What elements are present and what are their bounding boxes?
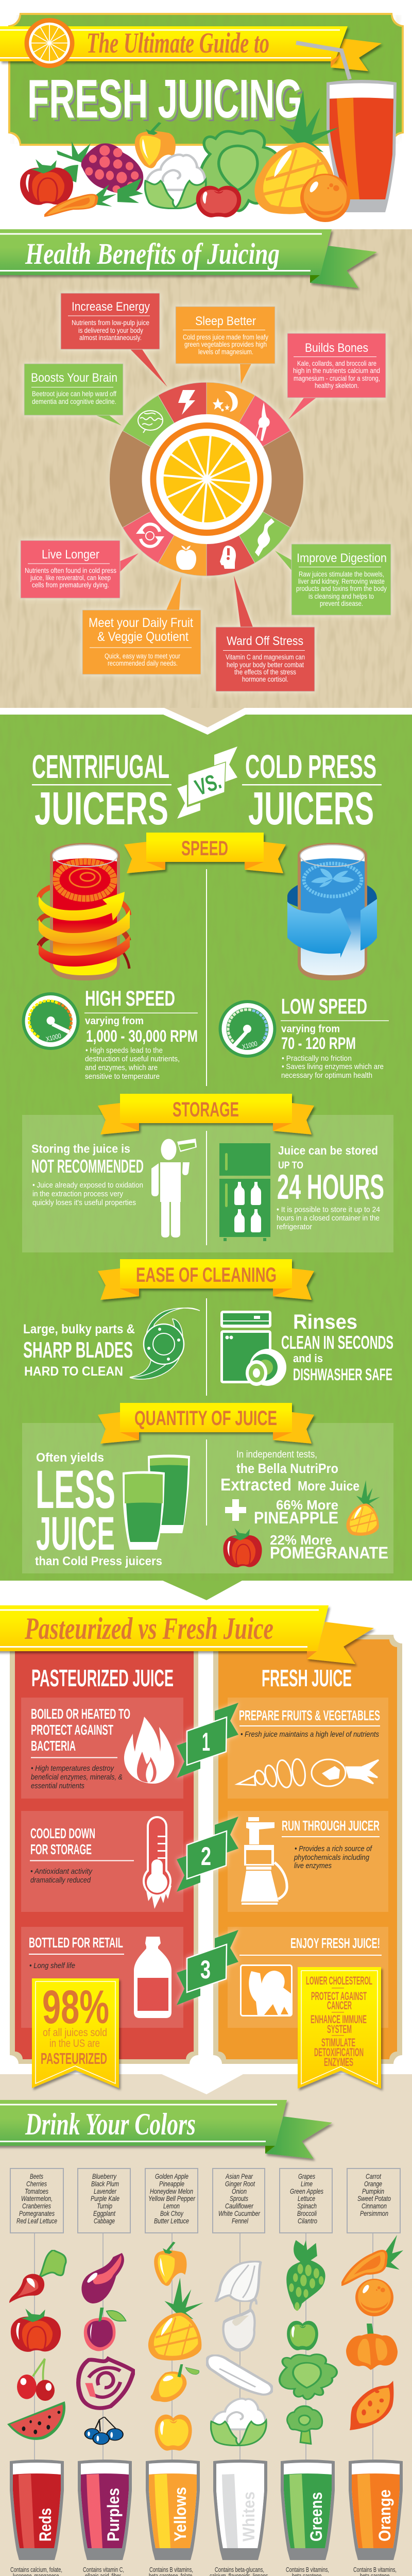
text block: low speed: 70 - 120 RPM (281, 1034, 356, 1053)
icon: moon and stars (213, 391, 238, 412)
text block: boiled or heated: • High temperatures destroy (31, 1764, 114, 1773)
list: whites: Asian Pear (225, 2172, 253, 2180)
heading ribbon: pasteurized vs fresh juice (0, 1605, 374, 1664)
glass: purples (78, 2460, 132, 2560)
tan section background (0, 229, 412, 708)
panel: title label (8, 13, 404, 146)
text block: storing not recommended: quickly loses it's useful properties (32, 1198, 136, 1207)
list: purples (78, 2168, 130, 2233)
icon: low speed gauge: X1000 (242, 1040, 258, 1050)
panel: pasteurized juice: PASTEURIZED JUICE (31, 1665, 174, 1691)
text block: bella nutripro results: POMEGRANATE (270, 1544, 388, 1562)
list: yellows: Yellow Bell Pepper (148, 2194, 196, 2202)
callout: ward off stress: the effects of the stress (234, 668, 296, 676)
banner: fresh juice benefits: ENZYMES (324, 2056, 353, 2069)
icon: two juice glasses (123, 1455, 190, 1550)
list: whites: White Cucumber (218, 2209, 261, 2217)
panel: quantity (22, 1423, 393, 1573)
glass: yellows: Yellows (171, 2487, 190, 2541)
callout: ward off stress: help your body better combat (227, 661, 304, 669)
text block: high speed (84, 986, 198, 1081)
text block: reds nutrients (8, 2566, 66, 2576)
banner: storage (98, 1094, 314, 1134)
banner: ease of cleaning (98, 1259, 314, 1300)
callout: live longer: cells from prematurely dying. (32, 581, 109, 589)
icon: white produce column (207, 2261, 272, 2446)
text block: greens nutrients (286, 2566, 329, 2576)
heading: centrifugal juicers: CENTRIFUGAL (32, 748, 169, 785)
callout: live longer: Nutrients often found in cold press (25, 567, 116, 574)
text block: storing not recommended (31, 1142, 144, 1207)
heading: the ultimate guide to: The Ultimate Guide to (87, 27, 269, 59)
text block: storing not recommended: • Juice already exposed to oxidation (32, 1181, 143, 1190)
callout: increase energy: Increase Energy (72, 300, 150, 314)
list: purples: Blueberry (92, 2172, 117, 2180)
list: purples: Black Plum (91, 2179, 119, 2188)
text block: high speed: sensitive to temperature (85, 1072, 160, 1081)
segment: fruit and veg (158, 479, 207, 576)
callout: daily fruit and veggie quotient: Meet your Daily Fruit (89, 616, 193, 630)
callout: builds bones: healthy skeleton. (315, 382, 359, 389)
panel: pasteurized juice (10, 1635, 198, 2064)
segment: energy (158, 382, 207, 479)
callout: improve digestion: prevent disease. (320, 600, 363, 607)
banner: ease of cleaning: EASE OF CLEANING (136, 1264, 277, 1286)
icon: high speed gauge (22, 992, 79, 1050)
text block: run through juicer: live enzymes (294, 1861, 332, 1870)
banner: 98 percent pasteurized (32, 1978, 119, 2088)
text block: oranges nutrients (353, 2566, 397, 2576)
text block: prepare fruits (239, 1707, 380, 1739)
glass: orange: Orange (375, 2489, 394, 2541)
text block: high speed: destruction of useful nutrients, (85, 1055, 180, 1063)
icon: orange produce column (341, 2235, 403, 2430)
icon: stressed head (220, 546, 236, 569)
text block: low speed: • Practically no friction (282, 1054, 352, 1063)
icon: yellow produce column (148, 2242, 203, 2451)
text block: stored up to 24 hours: hours in a closed container in the (277, 1214, 380, 1223)
list: whites (213, 2168, 265, 2233)
glass: greens (281, 2460, 335, 2560)
glass: yellows (146, 2460, 200, 2560)
callout: sleep better: Cold press juice made from leafy (183, 333, 268, 341)
text block: run through juicer: phytochemicals including (294, 1853, 370, 1862)
text block: rinses clean (281, 1311, 393, 1384)
callout: improve digestion: products and toxins from the body (296, 585, 387, 592)
text block: bottled for retail: BOTTLED FOR RETAIL (29, 1935, 123, 1951)
callout: sleep better: Sleep Better (195, 314, 256, 328)
callout: sleep better: levels of magnesium. (198, 348, 253, 355)
list: reds: Cherries (26, 2179, 47, 2188)
list: purples: Cabbage (94, 2216, 115, 2225)
icon: refrigerator with bottles (219, 1143, 270, 1241)
callout: builds bones: magnesium - crucial for a strong, (294, 375, 380, 382)
banner: quantity of juice (98, 1403, 314, 1444)
icon: retail bottle (134, 1937, 171, 2018)
banner: 98 percent pasteurized: of all juices sold (43, 2027, 107, 2039)
list: greens: Broccoli (297, 2209, 317, 2217)
text block: boiled or heated: PROTECT AGAINST (31, 1722, 113, 1738)
heading ribbon: drink your colors: Drink Your Colors (25, 2107, 196, 2141)
icon: apple (176, 546, 196, 570)
green section background (0, 715, 412, 1581)
list: greens: Spinach (297, 2202, 317, 2210)
callout: ward off stress (216, 575, 315, 691)
icon: digestive tract (255, 518, 274, 556)
glass: reds (10, 2460, 64, 2560)
segment: stress (207, 479, 255, 576)
text block: bella nutripro results: the Bella NutriPro (236, 1461, 338, 1476)
text block: bottled for retail: • Long shelf life (29, 1961, 75, 1970)
vs ribbon (177, 747, 237, 819)
text block: sharp blades: SHARP BLADES (23, 1337, 133, 1363)
banner: 98 percent pasteurized: 98% (42, 1981, 109, 2033)
list: yellows: Lemon (163, 2202, 180, 2210)
icon: number 1 ribbon: 1 (202, 1727, 210, 1756)
banner: fresh juice benefits (298, 1967, 381, 2089)
heading: cold press juicers (242, 748, 382, 835)
text block: low speed: • Saves living enzymes which are (282, 1062, 384, 1071)
heading: centrifugal juicers (32, 748, 171, 835)
heading: centrifugal juicers: JUICERS (35, 783, 168, 835)
drink your colors background (0, 2074, 412, 2576)
list: yellows: Honeydew Melon (150, 2187, 193, 2195)
text block: bella nutripro results: 66% More (276, 1497, 338, 1513)
text block: run through juicer (282, 1818, 380, 1870)
text block: low speed: necessary for optimum health (281, 1071, 372, 1080)
icon: number 3 ribbon (177, 1930, 238, 2005)
icon: juicer machine (241, 1817, 287, 1905)
banner: quantity of juice: QUANTITY OF JUICE (134, 1407, 277, 1430)
text block: purples nutrients (83, 2566, 124, 2576)
callout: increase energy (61, 293, 167, 387)
list: oranges: Cinnamon (362, 2202, 387, 2210)
icon: juicer blade (130, 1308, 200, 1379)
callout: sleep better (176, 307, 275, 384)
heading ribbon: drink your colors (0, 2100, 332, 2159)
text block: high speed: varying from (85, 1015, 144, 1027)
list: reds: Pomegranates (19, 2209, 55, 2217)
icon: sliced carrot (237, 1758, 379, 1789)
list: oranges: Persimmon (360, 2209, 388, 2217)
text block: boiled or heated: BOILED OR HEATED TO (31, 1706, 130, 1722)
icon: pineapple (347, 1480, 380, 1536)
text block: rinses clean: and is (293, 1352, 323, 1365)
callout: live longer: juice, like resveratrol, can keep (30, 574, 111, 582)
list: reds: Red Leaf Lettuce (16, 2216, 57, 2225)
icon: pomegranate (223, 1528, 262, 1567)
callout: improve digestion: Improve Digestion (297, 551, 387, 565)
icon: large orange slice (142, 414, 272, 544)
list: reds: Beets (30, 2172, 43, 2180)
segment: longevity (123, 479, 207, 563)
icon: produce pile (20, 90, 350, 222)
list: yellows: Butter Lettuce (154, 2216, 189, 2225)
glass: reds: Reds (36, 2508, 55, 2541)
banner: speed (124, 833, 286, 873)
icon: number 2 ribbon: 2 (201, 1842, 211, 1871)
text block: stored up to 24 hours (277, 1144, 384, 1231)
icon: bone (256, 402, 270, 441)
banner: fresh juice benefits: CANCER (327, 1999, 352, 2012)
text block: whites nutrients (208, 2566, 271, 2576)
text block: boiled or heated: BACTERIA (31, 1738, 76, 1754)
callout: ward off stress: Ward Off Stress (227, 634, 303, 648)
glass: whites (213, 2460, 267, 2560)
icon: low speed gauge (218, 1000, 276, 1058)
banner: speed: SPEED (181, 837, 228, 860)
icon: orange slice (25, 18, 74, 68)
icon: low speed cold press cylinder (287, 843, 377, 980)
list: whites: Fennel (232, 2216, 249, 2225)
callout: builds bones (287, 333, 386, 419)
icon: cycle arrows (136, 524, 164, 547)
list: reds (10, 2168, 63, 2233)
text block: low speed: LOW SPEED (281, 994, 367, 1018)
text block: storing not recommended: NOT RECOMMENDED (31, 1156, 144, 1177)
banner: fresh juice benefits: STIMULATE (321, 2036, 355, 2049)
text block: greens nutrients: Contains B vitamins, (286, 2566, 329, 2573)
icon: plus sign (225, 1499, 246, 1521)
list: purples: Eggplant (93, 2209, 116, 2217)
segment: bones (207, 395, 290, 479)
list: reds: Tomatoes (25, 2187, 48, 2195)
text block: sharp blades: Large, bulky parts & (23, 1322, 135, 1336)
segment: digestion (207, 479, 290, 563)
icon: healthy person flexing (241, 1965, 291, 2015)
text block: bella nutripro results: In independent tests, (236, 1449, 317, 1460)
list: whites: Onion (232, 2187, 247, 2195)
icon: lightning bolt (178, 390, 195, 415)
callout: ward off stress: hormone cortisol. (242, 675, 288, 683)
callout: builds bones: Builds Bones (305, 341, 368, 355)
glass: greens: Greens (307, 2492, 325, 2541)
heading ribbon: health benefits of juicing: Health Benefits of Juicing (25, 237, 280, 270)
text block: cooled down: COOLED DOWN (30, 1825, 95, 1841)
callout: boosts your brain: Beetroot juice can help ward off (32, 390, 116, 398)
text block: cooled down: dramatically reduced (30, 1876, 91, 1885)
callout: improve digestion: Raw juices stimulate the bowels, (299, 570, 384, 578)
callout: live longer: Live Longer (42, 548, 99, 562)
callout: ward off stress: Vitamin C and magnesium can (226, 653, 305, 661)
title ribbon (0, 26, 382, 71)
icon: green produce column (280, 2240, 337, 2444)
callout: builds bones: high in the nutrients calcium and (293, 367, 380, 375)
text block: less juice: than Cold Press juicers (35, 1554, 162, 1568)
callout: increase energy: is delivered to your body (78, 327, 143, 334)
list: whites: Ginger Root (225, 2179, 255, 2188)
text block: purples nutrients: Contains vitamin C, (83, 2566, 124, 2573)
section divider chevron (0, 708, 412, 735)
text block: boiled or heated: beneficial enzymes, minerals, & (31, 1773, 123, 1782)
list: greens: Green Apples (290, 2187, 323, 2195)
text block: stored up to 24 hours: Juice can be stored (278, 1144, 378, 1157)
callout: improve digestion: liver and kidney. Removing waste (298, 578, 385, 585)
icon: flame (124, 1717, 174, 1784)
list: oranges: Pumpkin (362, 2187, 384, 2195)
icon: person drinking juice (151, 1139, 197, 1238)
list: oranges: Sweet Potato (357, 2194, 391, 2202)
text block: less juice: JUICE (36, 1507, 115, 1560)
list: yellows (145, 2168, 198, 2233)
banner: 98 percent pasteurized: PASTEURIZED (41, 2049, 107, 2067)
text block: sharp blades (23, 1322, 135, 1379)
text block: bella nutripro results: 22% More (270, 1532, 332, 1548)
list: yellows: Golden Apple (155, 2172, 188, 2180)
banner: fresh juice benefits: SYSTEM (327, 2023, 352, 2036)
icon: high speed centrifugal cylinder (39, 843, 130, 980)
banner: 98 percent pasteurized: in the US are (49, 2038, 100, 2049)
list: yellows: Pineapple (159, 2179, 184, 2188)
icon: number 1 ribbon (177, 1703, 238, 1778)
title: fresh juicing (27, 69, 305, 133)
text block: bella nutripro results: More Juice (298, 1478, 359, 1494)
callout: daily fruit and veggie quotient (82, 577, 201, 674)
list: oranges: Carrot (366, 2172, 382, 2180)
list: greens: Cilantro (298, 2216, 317, 2225)
text block: bella nutripro results (220, 1449, 388, 1562)
icon: red produce column (7, 2250, 66, 2440)
text block: high speed: • High speeds lead to the (85, 1046, 163, 1055)
text block: high speed: HIGH SPEED (85, 986, 175, 1010)
callout: boosts your brain: dementia and cognitive decline. (32, 398, 116, 405)
glass: whites: Whites (239, 2492, 258, 2541)
text block: storing not recommended: Storing the juice is (31, 1142, 130, 1155)
text block: stored up to 24 hours: • It is possible to store it up to 24 (277, 1206, 380, 1214)
text block: boiled or heated (31, 1706, 130, 1790)
text block: bottled for retail (29, 1935, 124, 1970)
list: oranges: Orange (364, 2179, 382, 2188)
chart: benefits wheel (110, 382, 303, 576)
text block: yellows nutrients: Contains B vitamins, (149, 2566, 193, 2573)
segment: sleep (207, 382, 255, 479)
text block: sharp blades: HARD TO CLEAN (24, 1364, 123, 1379)
text block: prepare fruits: • Fresh juice maintains a high level of nutrients (241, 1730, 379, 1739)
glass: orange (349, 2460, 403, 2560)
text block: whites nutrients: Contains beta-glucans, (215, 2566, 264, 2573)
text block: high speed: and enzymes, which are (85, 1063, 158, 1072)
heading ribbon: health benefits of juicing (0, 229, 377, 288)
list: greens: Grapes (298, 2172, 315, 2180)
text block: boiled or heated: essential nutrients (31, 1782, 84, 1790)
strings connecting boxes to glasses (35, 2233, 373, 2460)
list: yellows: Bok Choy (160, 2209, 184, 2217)
icon: high speed gauge: X1000 (45, 1032, 62, 1043)
callout: daily fruit and veggie quotient: & Veggie Quotient (97, 630, 188, 644)
text block: stored up to 24 hours: UP TO (278, 1160, 303, 1171)
list: reds: Cranberries (22, 2202, 51, 2210)
text block: less juice (35, 1451, 162, 1568)
icon: thermometer (143, 1816, 171, 1909)
text block: reds nutrients: Contains calcium, folate, (10, 2566, 62, 2573)
callout: sleep better: green vegetables provides high (184, 341, 267, 348)
text block: cooled down: • Antioxidant activity (30, 1867, 93, 1876)
text block: low speed (281, 994, 389, 1080)
callout: increase energy: Nutrients from low-pulp juice (72, 319, 149, 327)
text block: cooled down (30, 1825, 134, 1885)
banner: fresh juice benefits: DETOXIFICATION (314, 2046, 364, 2059)
callout: boosts your brain (24, 364, 123, 426)
text block: stored up to 24 hours: refrigerator (277, 1223, 312, 1231)
icon: juice glass with straw (296, 43, 397, 212)
text block: oranges nutrients: Contains B vitamins, (353, 2566, 397, 2573)
list: greens: Lettuce (298, 2194, 315, 2202)
callout: live longer (21, 540, 139, 598)
icon: number 3 ribbon: 3 (200, 1955, 211, 1984)
list: whites: Sprouts (230, 2194, 248, 2202)
panel: fresh juice (213, 1635, 402, 2064)
heading ribbon: pasteurized vs fresh juice: Pasteurized vs Fresh Juice (24, 1612, 273, 1646)
text block: bella nutripro results: Extracted (220, 1475, 291, 1494)
icon: purple produce column (78, 2253, 134, 2445)
panel: storage (22, 1115, 393, 1252)
list: greens: Lime (301, 2179, 313, 2188)
text block: storing not recommended: in the extraction process very (32, 1190, 123, 1198)
callout: improve digestion: is cleansing and helps to (308, 592, 374, 600)
list: whites: Cauliflower (225, 2202, 254, 2210)
glass: purples: Purples (104, 2488, 123, 2541)
text block: bella nutripro results: PINEAPPLE (254, 1509, 338, 1527)
list: purples: Lavender (94, 2187, 117, 2195)
list: purples: Purple Kale (91, 2194, 119, 2202)
callout: improve digestion (275, 544, 391, 615)
text block: yellows nutrients (149, 2566, 194, 2576)
banner: storage: STORAGE (173, 1098, 239, 1121)
text block: low speed: varying from (281, 1023, 340, 1035)
vs ribbon: VS. (192, 768, 225, 801)
icon: number 2 ribbon (177, 1817, 238, 1892)
segment: brain (123, 395, 207, 479)
icon: brain (138, 411, 163, 433)
callout: daily fruit and veggie quotient: Quick, easy way to meet your (105, 652, 180, 660)
text block: run through juicer: • Provides a rich source of (295, 1844, 373, 1853)
callout: builds bones: Kale, collards, and broccoli are (297, 360, 376, 367)
text block: less juice: LESS (36, 1460, 115, 1520)
list: purples: Turnip (97, 2202, 112, 2210)
text block: cooled down: FOR STORAGE (30, 1841, 92, 1857)
section divider arrow (163, 1581, 242, 1600)
callout: boosts your brain: Boosts Your Brain (31, 371, 117, 385)
callout: daily fruit and veggie quotient: recommended daily needs. (108, 659, 178, 667)
text block: high speed: 1,000 - 30,000 RPM (86, 1027, 198, 1045)
callout: increase energy: almost instantaneously. (79, 334, 142, 342)
list: oranges (347, 2168, 400, 2233)
text block: less juice: Often yields (36, 1451, 104, 1465)
text block: rinses clean: Rinses (293, 1311, 357, 1333)
list: greens (280, 2168, 332, 2233)
list: reds: Watermelon, (21, 2194, 53, 2202)
icon: dishwasher with plates (220, 1311, 286, 1386)
